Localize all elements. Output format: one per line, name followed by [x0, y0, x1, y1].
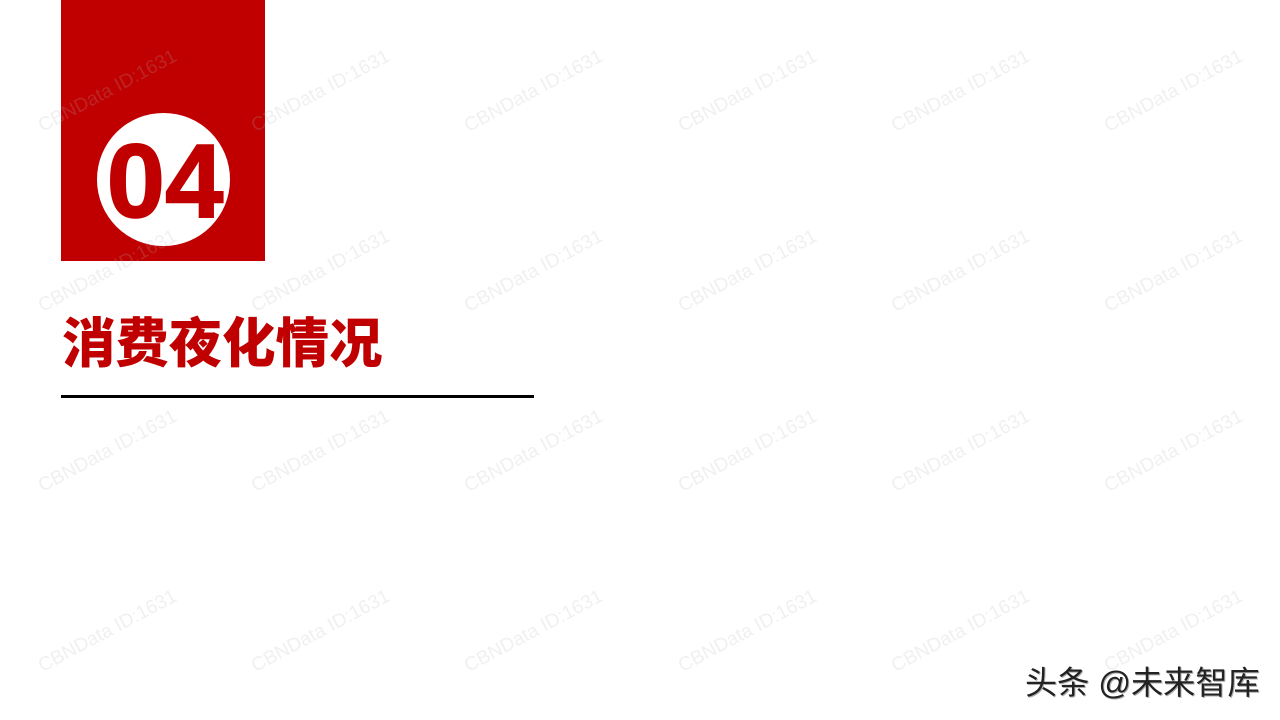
- title: 消费夜化情况: [62, 315, 382, 374]
- watermark grid: CBNData ID:1631: [248, 46, 393, 137]
- watermark grid: CBNData ID:1631: [675, 226, 820, 317]
- watermark grid: CBNData ID:1631: [888, 46, 1033, 137]
- footer source credit: 头条 @未来智库: [1025, 665, 1260, 701]
- watermark grid: CBNData ID:1631: [888, 406, 1033, 497]
- watermark grid: CBNData ID:1631: [35, 46, 180, 137]
- watermark grid: CBNData ID:1631: [248, 226, 393, 317]
- panel: red section number block: [60, 0, 265, 261]
- icon: white circle behind number: [97, 113, 230, 246]
- watermark grid: CBNData ID:1631: [461, 586, 606, 677]
- watermark grid: CBNData ID:1631: [888, 226, 1033, 317]
- title underline: [61, 395, 534, 398]
- watermark grid: CBNData ID:1631: [35, 586, 180, 677]
- watermark grid: CBNData ID:1631: [675, 586, 820, 677]
- watermark grid: CBNData ID:1631: [675, 46, 820, 137]
- watermark grid: CBNData ID:1631: [888, 586, 1033, 677]
- watermark grid: CBNData ID:1631: [1101, 586, 1246, 677]
- section number: 04: [107, 123, 223, 240]
- watermark grid: CBNData ID:1631: [35, 226, 180, 317]
- watermark grid: CBNData ID:1631: [1101, 46, 1246, 137]
- watermark grid: CBNData ID:1631: [35, 406, 180, 497]
- watermark grid: CBNData ID:1631: [675, 406, 820, 497]
- watermark grid: CBNData ID:1631: [1101, 226, 1246, 317]
- watermark grid: CBNData ID:1631: [248, 406, 393, 497]
- watermark grid: CBNData ID:1631: [461, 226, 606, 317]
- watermark grid: CBNData ID:1631: [1101, 406, 1246, 497]
- watermark grid: CBNData ID:1631: [248, 586, 393, 677]
- watermark grid: CBNData ID:1631: [461, 46, 606, 137]
- watermark grid: CBNData ID:1631: [461, 406, 606, 497]
